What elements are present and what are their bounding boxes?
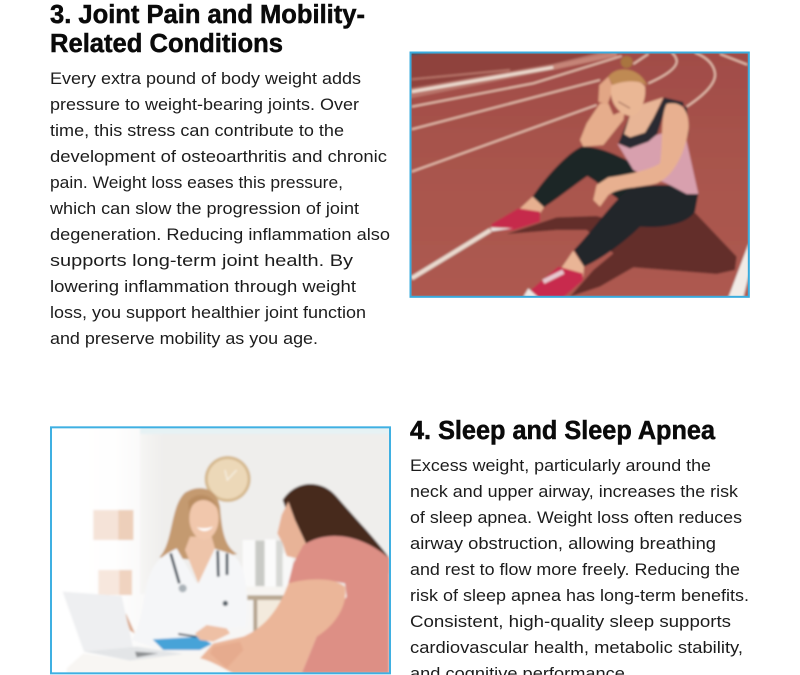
ankles [518, 197, 544, 213]
text block: section 3 body: lowering inflammation through weight [50, 277, 356, 296]
text block: section 4 body: Excess weight, particularly around the [410, 456, 711, 475]
track surface [410, 52, 749, 297]
binders and shelf [243, 540, 255, 587]
stethoscope [171, 551, 227, 583]
shoes [491, 208, 540, 231]
text block: section 3 body: development of osteoarthritis and chronic [50, 147, 388, 166]
doctor hair [159, 488, 237, 560]
photo border [410, 52, 749, 297]
bra and straps [618, 97, 689, 148]
text block: section 4 body [410, 456, 749, 675]
text block: section 3 body: supports long-term joint health. By [50, 251, 354, 270]
window blinds tint [92, 509, 120, 541]
text block: section 4 body: and rest to flow more freely. Reducing the [410, 560, 740, 579]
far leg [533, 147, 640, 207]
photo border [51, 427, 390, 673]
text block: section 3 body: time, this stress can contribute to the [50, 121, 344, 140]
text block: section 3 body: degeneration. Reducing inflammation also [50, 225, 390, 244]
patient face [277, 502, 307, 558]
patient arm [200, 579, 345, 673]
chest [624, 97, 663, 137]
heading: section 3: Related Conditions [50, 30, 283, 58]
text block: section 4 body: neck and upper airway, increases the risk [410, 482, 739, 501]
lane lines [412, 53, 747, 172]
desk [67, 654, 128, 672]
text block: section 3 body: Every extra pound of body weight adds [50, 69, 361, 88]
clipboard [153, 637, 212, 650]
text block: section 3 body: which can slow the progression of joint [49, 199, 359, 218]
heading: section 3: 3. Joint Pain and Mobility- [50, 1, 365, 29]
text block: section 3 body: pain. Weight loss eases this pressure, [50, 173, 343, 192]
cast shadow [507, 213, 737, 297]
near arm [593, 103, 689, 207]
text block: section 4 body: of sleep apnea. Weight loss often reduces [410, 508, 742, 527]
photo: doctor consulting with patient [51, 427, 390, 673]
heading: section 4: 4. Sleep and Sleep Apnea [410, 417, 716, 445]
doctor coat [153, 547, 248, 600]
photo: woman sitting on running track [410, 52, 749, 297]
head [611, 80, 645, 116]
patient shirt [288, 536, 389, 673]
text block: section 4 body: risk of sleep apnea has long-term benefits. [410, 586, 749, 605]
text block: section 3 body [49, 69, 390, 348]
arm on head [580, 103, 625, 147]
text block: section 4 body: airway obstruction, allowing breathing [410, 534, 716, 553]
near leg [574, 185, 698, 267]
text block: section 4 body: Consistent, high-quality sleep supports [410, 612, 731, 631]
text block: section 3 body: and preserve mobility as you age. [50, 329, 318, 348]
heading: section 3 [50, 1, 365, 58]
patient hair [282, 482, 389, 560]
laptop [64, 592, 132, 652]
wall clock [205, 456, 251, 502]
text block: section 3 body: loss, you support healthier joint function [50, 303, 366, 322]
doctor neck and face [185, 537, 215, 583]
tank top [617, 127, 698, 194]
office wall [158, 602, 252, 653]
text block: section 3 body: pressure to weight-bearing joints. Over [50, 95, 359, 114]
text block: section 4 body: cardiovascular health, metabolic stability, [410, 638, 743, 657]
